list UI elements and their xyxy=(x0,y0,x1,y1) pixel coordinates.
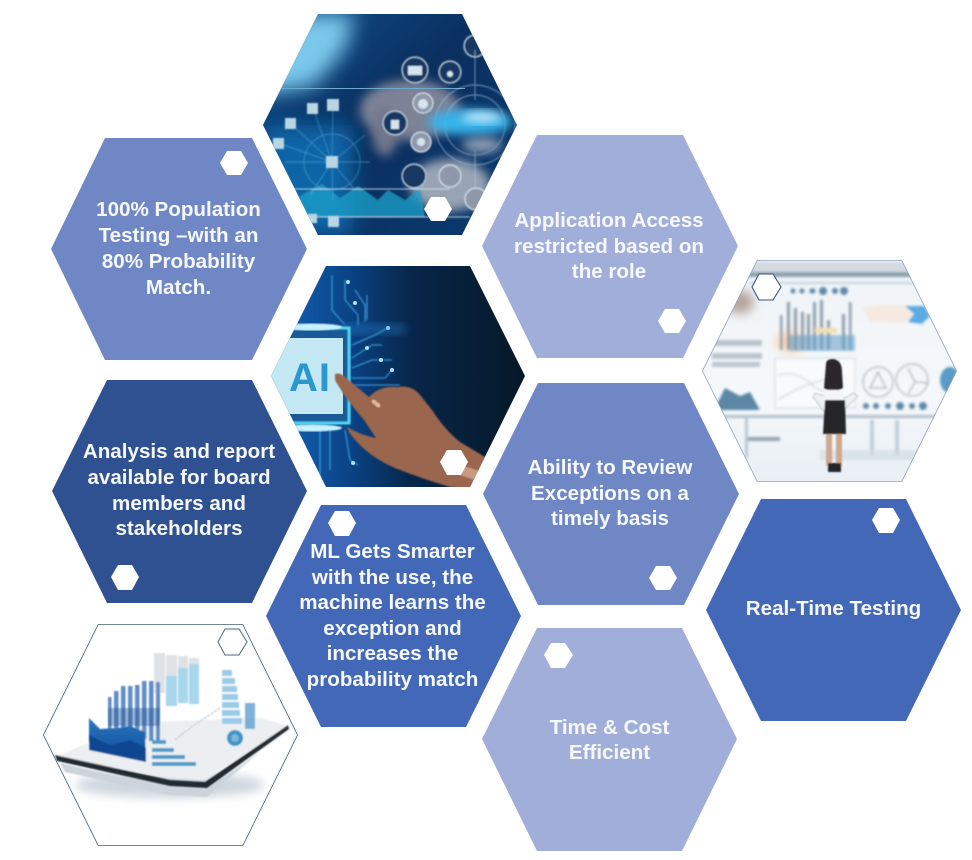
badge xyxy=(111,565,139,590)
text: with the use, the xyxy=(311,566,473,589)
AI label: AI xyxy=(289,356,331,400)
text: Analysis and report xyxy=(83,440,275,463)
hexagon: time and cost efficient xyxy=(482,628,737,851)
hexagon: 100% population testing xyxy=(51,138,307,360)
hexagon outline xyxy=(702,260,957,482)
hexagon: analysis and report xyxy=(52,380,307,603)
badge xyxy=(872,508,900,533)
badge: tablet image xyxy=(218,629,247,655)
text: 100% Population xyxy=(96,198,261,221)
badge: top image xyxy=(424,197,452,221)
badge xyxy=(544,643,573,668)
text: Application Access xyxy=(514,209,704,232)
text: restricted based on xyxy=(514,235,704,258)
text: exception and xyxy=(323,617,462,640)
text: available for board xyxy=(87,466,271,489)
text: Ability to Review xyxy=(528,456,693,479)
text: stakeholders xyxy=(115,517,243,540)
text: probability match xyxy=(307,668,478,691)
text: Efficient xyxy=(569,741,650,764)
badge: AI image xyxy=(440,450,468,475)
image hexagon: woman viewing dashboards xyxy=(702,260,960,482)
image hexagon: digital network and hand xyxy=(263,14,517,235)
hexagon: real-time testing xyxy=(706,499,961,721)
text: machine learns the xyxy=(299,591,486,614)
hand xyxy=(335,374,490,490)
hexagon outline xyxy=(43,624,298,846)
image hexagon: AI chip and hand xyxy=(271,266,525,490)
hexagon: ability to review exceptions xyxy=(483,383,739,605)
badge xyxy=(649,566,677,590)
text: Testing –with an xyxy=(99,224,258,247)
text: Match. xyxy=(146,276,211,299)
woman figure xyxy=(813,359,858,472)
text: timely basis xyxy=(551,507,669,530)
text: the role xyxy=(572,260,646,283)
badge xyxy=(658,309,686,333)
text: ML Gets Smarter xyxy=(310,540,475,563)
text: Exceptions on a xyxy=(531,482,690,505)
badge xyxy=(328,511,356,536)
text: 80% Probability xyxy=(102,250,256,273)
text: increases the xyxy=(327,642,458,665)
text: members and xyxy=(112,492,246,515)
image hexagon: tablet with charts xyxy=(43,624,298,846)
badge: woman image xyxy=(752,274,781,300)
hexagon: ML gets smarter xyxy=(266,505,521,727)
hexagon: application access xyxy=(482,135,738,358)
badge xyxy=(220,151,248,175)
text: Real-Time Testing xyxy=(746,597,921,620)
text: Time & Cost xyxy=(550,716,670,739)
